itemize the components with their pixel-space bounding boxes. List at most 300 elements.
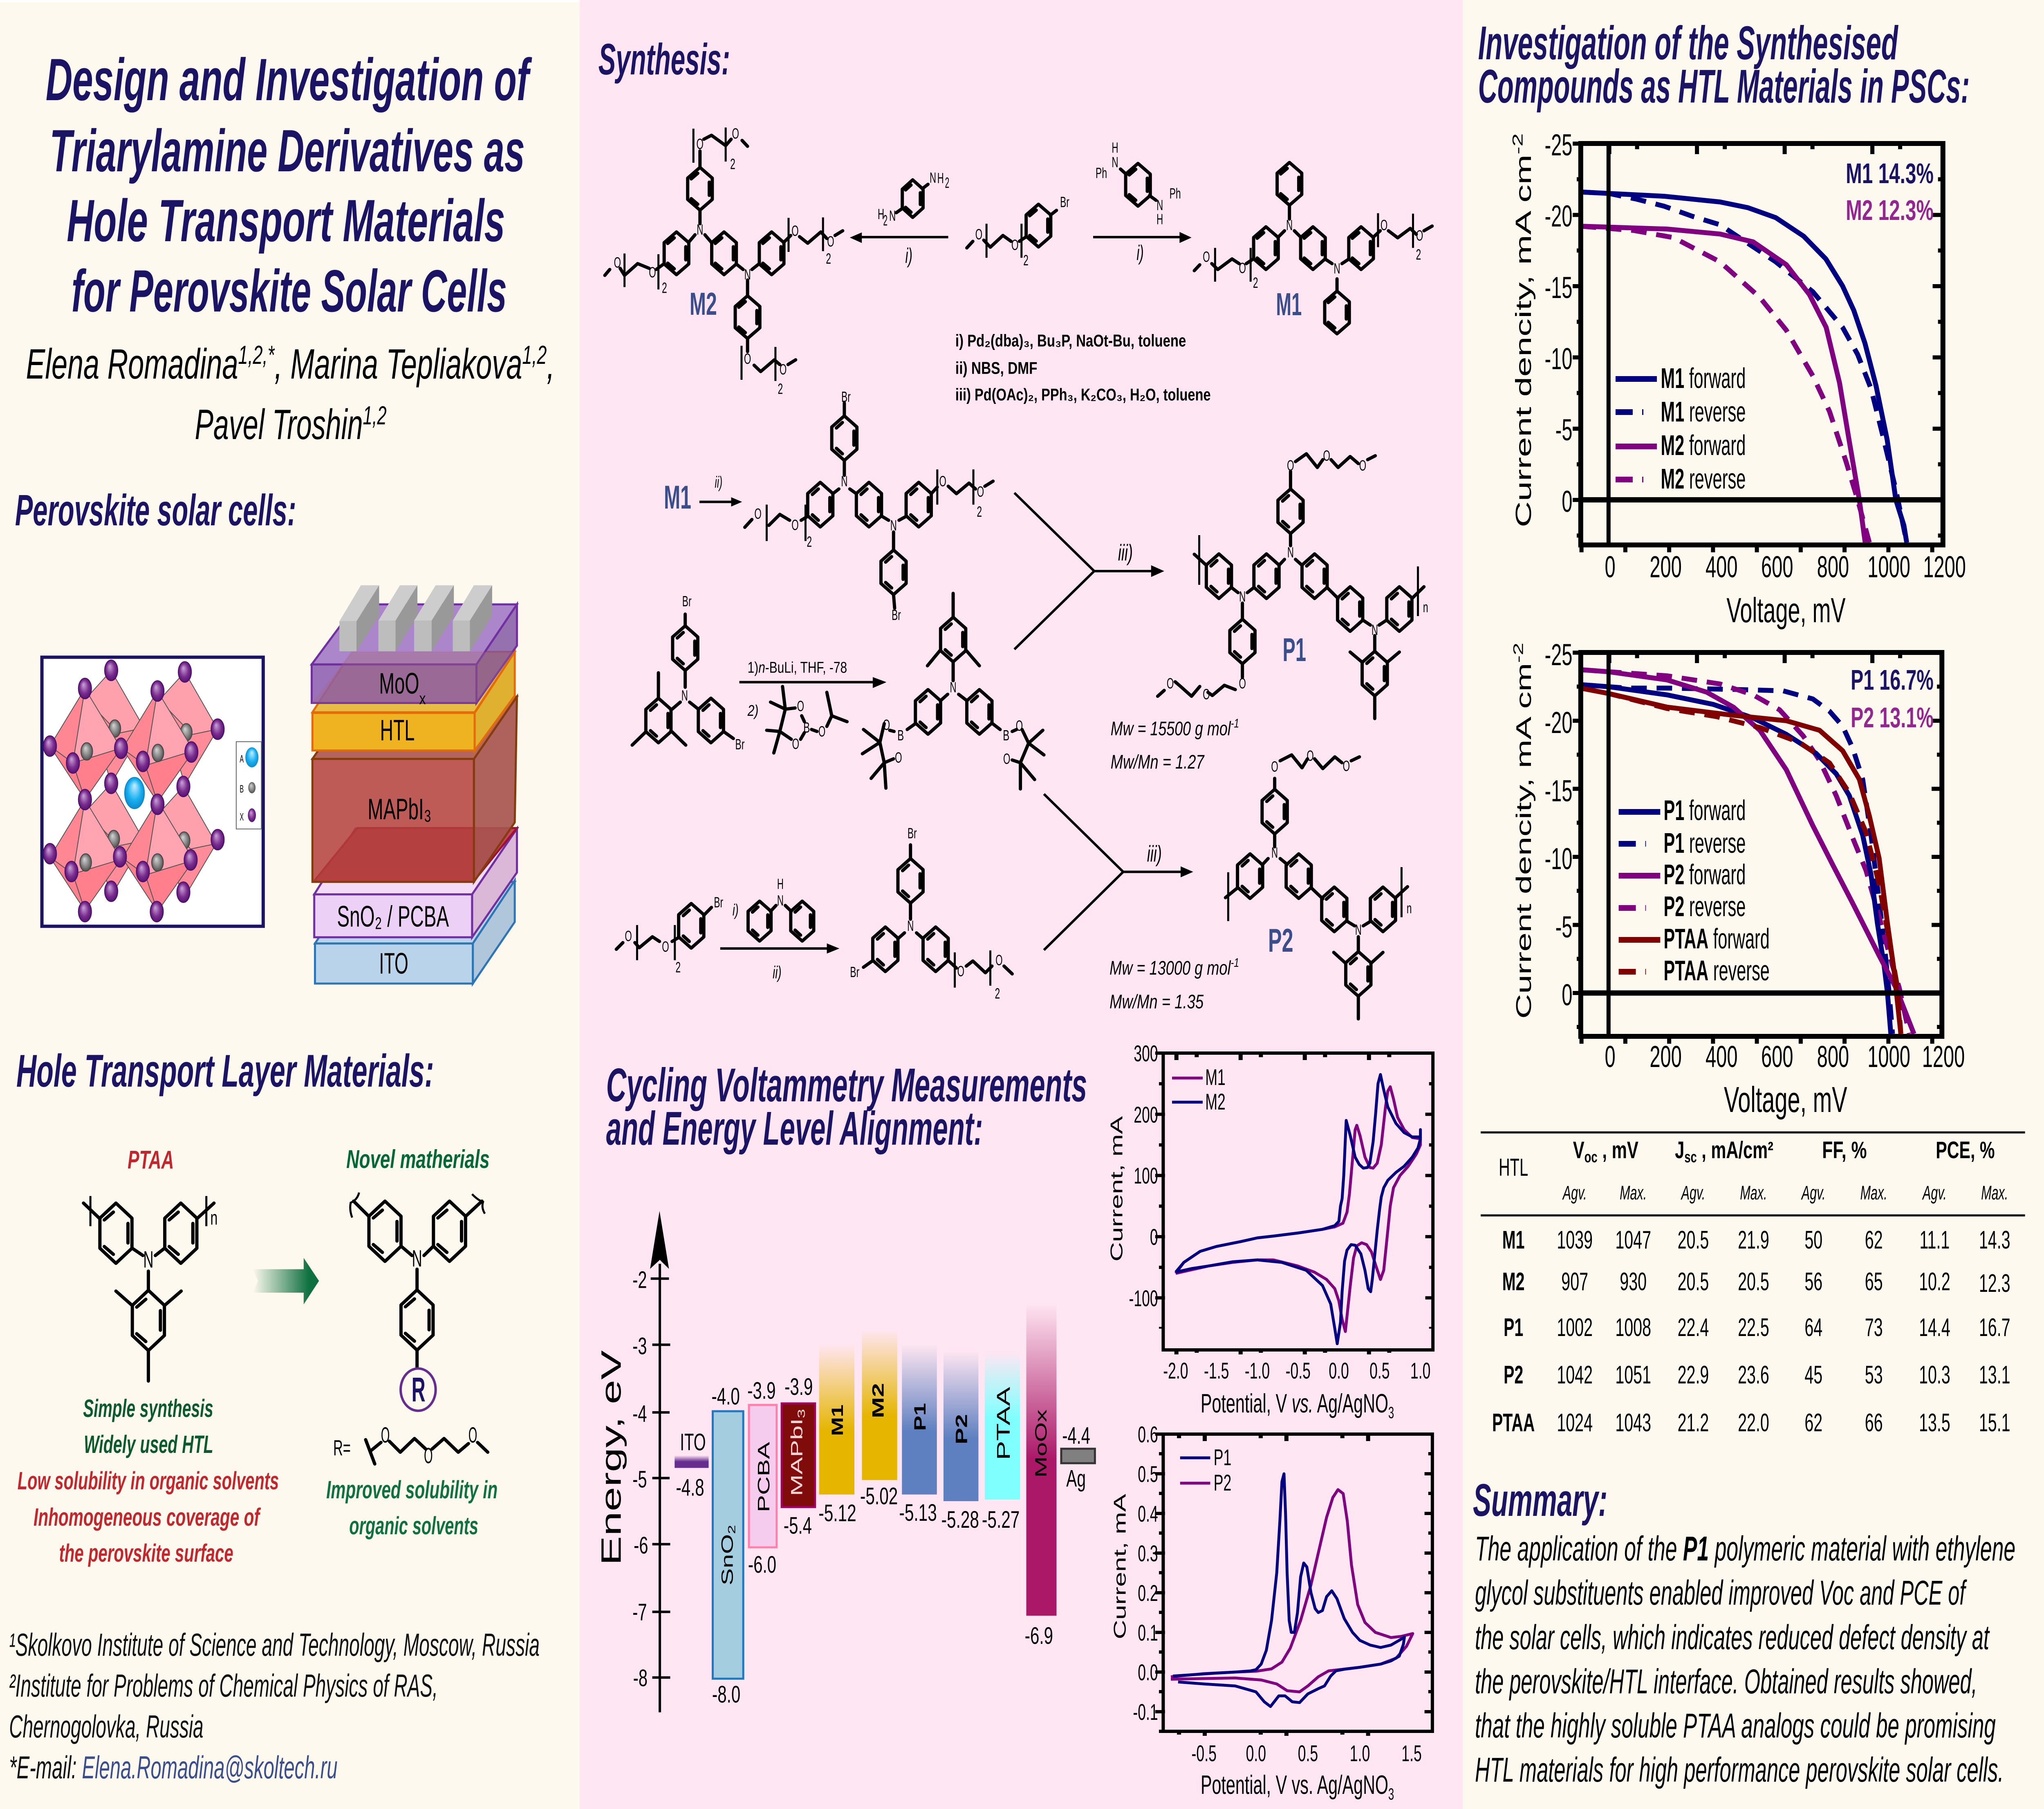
rotated bar labels: PCBA [754, 1442, 773, 1512]
novel material benefit [326, 1475, 498, 1540]
borylation arrow and conditions: 2) [747, 702, 758, 719]
p-phenylenediamine reagent: H [878, 206, 884, 222]
authors: 1,2 [522, 341, 547, 370]
isopropoxy boronate reagent: B [803, 720, 810, 736]
rotated bar labels [718, 1383, 1050, 1585]
dibromo mesitylamine: Br [682, 593, 692, 610]
heading: perovskite solar cells: Perovskite solar cells: [15, 486, 296, 535]
title: for Perovskite Solar Cells [72, 258, 507, 324]
CV2 frame and ticks [1160, 1432, 1432, 1734]
P1 molecular weight: Mw/Mn = 1.27 [1111, 751, 1205, 773]
synthesis scheme lower: polymers P1 and P2: Br [735, 736, 744, 753]
novel material structure: N [412, 1245, 422, 1271]
novel material structure: R= [333, 1435, 351, 1460]
table header: , mV [1598, 1137, 1638, 1163]
summary text: that the highly soluble PTAA analogs could be promising [1475, 1706, 1996, 1745]
N,N'-diphenyl-p-phenylenediamine reagent: Ph [1096, 164, 1107, 181]
diphenylamine reagent and arrow [720, 876, 839, 982]
novel material structure: O [424, 1443, 433, 1468]
table header: sc [1684, 1148, 1697, 1166]
row P1: 73 [1865, 1314, 1883, 1342]
JV2 efficiency labels: P1 16.7% [1851, 664, 1934, 696]
energy bars: -4 [632, 1401, 647, 1427]
affiliations: *E-mail: Elena.Romadina@skoltech.ru [9, 1750, 338, 1785]
legend: A B X ions: A [240, 753, 244, 764]
synthesis scheme upper: M1 and M2: 2 [945, 175, 949, 191]
CV1 tick labels: 200 [1134, 1102, 1158, 1128]
energy level diagram [596, 1211, 1095, 1713]
table header: HTL [1499, 1153, 1528, 1181]
JV1 tick labels: 200 [1650, 550, 1682, 584]
brominated M1: Br [841, 389, 851, 405]
synthesis scheme lower: polymers P1 and P2: Br [714, 894, 723, 911]
JV2 frame and axes [1578, 651, 1946, 1040]
bis-boronate monomer: O [883, 717, 890, 733]
CV1 frame and ticks [1160, 1051, 1433, 1352]
row M2: 907 [1561, 1268, 1588, 1296]
JV1 legend: M2 reverse [1661, 463, 1746, 495]
polymer P1: N [1372, 622, 1378, 638]
JV2 tick labels: -5 [1555, 910, 1572, 944]
synthesis scheme upper: M1 and M2: i) Pd₂(dba)₃, Bu₃P, NaOt-Bu, toluene [955, 331, 1186, 350]
PTAA pros and cons: the perovskite surface [59, 1539, 233, 1567]
brominated M1: O [939, 473, 946, 490]
bis-boronate monomer: N [950, 679, 957, 696]
JV1 axis titles: Voltage, mV [1726, 592, 1846, 630]
converging arrow to P2 [1044, 794, 1193, 950]
rotated bar labels: M2 [870, 1383, 888, 1418]
authors: 1,2,* [238, 341, 275, 370]
authors: Elena Romadina [26, 341, 226, 388]
CV1 legend: M2 [1205, 1089, 1226, 1114]
row PTAA: 21.2 [1678, 1409, 1709, 1437]
CV2 tick labels: -0.1 [1133, 1699, 1158, 1725]
panel: left background [0, 2, 580, 1809]
authors [26, 341, 555, 448]
layer: MoOx: MoO [379, 667, 419, 700]
PTAA structure [83, 1196, 217, 1381]
P2 molecular weight: -1 [1231, 955, 1239, 970]
legend: A B X ions: X [240, 811, 244, 823]
chart: CV of M1 and M2 [1107, 1041, 1433, 1422]
starting bromide: O [1011, 237, 1018, 253]
panel: middle background [580, 0, 1463, 1809]
summary text [1475, 1529, 2015, 1789]
CV1 curves [1176, 1074, 1421, 1344]
JV1 tick labels: 1200 [1923, 550, 1966, 584]
row PTAA [1492, 1409, 2010, 1437]
row M2: 56 [1804, 1268, 1822, 1296]
layer: HTL [312, 652, 515, 751]
polymer P2: N [1355, 922, 1362, 938]
bis-boronate monomer: B [897, 727, 904, 744]
compound M2: 2 [826, 250, 831, 267]
JV1 tick labels: -5 [1555, 413, 1572, 447]
JV2 legend: P1 forward [1664, 795, 1746, 827]
heading: cycling voltammetry: and Energy Level Alignment: [606, 1102, 983, 1155]
row PTAA: 13.5 [1919, 1409, 1950, 1437]
bis-boronate monomer: B [1003, 727, 1009, 744]
polymer P2 [1226, 748, 1412, 1019]
gradient arrow [253, 1258, 319, 1305]
CV1 legend [1172, 1065, 1226, 1114]
JV1 tick labels: 0 [1562, 485, 1572, 519]
CV2 tick labels: 0.1 [1138, 1620, 1158, 1645]
energy bars: -6 [634, 1532, 648, 1559]
arrow to M1: i) [1136, 241, 1144, 265]
brominated M1 [745, 389, 993, 623]
layer: MAPbI3: MAPbI₃ [368, 793, 431, 826]
energy bars: -8.0 [712, 1681, 740, 1708]
row M1: 14.3 [1979, 1226, 2010, 1254]
heading: synthesis: Synthesis: [598, 35, 730, 84]
energy bars: -5.12 [818, 1500, 856, 1527]
chart: J-V curves P1, P2 and PTAA [1511, 638, 1965, 1120]
CV2 axis titles: 3 [1388, 1785, 1394, 1804]
synthesis scheme upper: M1 and M2: Ph [1170, 185, 1181, 202]
rotated bar labels: SnO [718, 1535, 736, 1585]
Novel materials label: Novel matherials [346, 1145, 490, 1173]
brominated M1: N [841, 473, 847, 490]
compound M2: O [614, 254, 621, 271]
synthesis scheme upper: M1 and M2: iii) Pd(OAc)₂, PPh₃, K₂CO₃, H₂O, toluene [955, 385, 1211, 404]
JV1 tick labels: -10 [1544, 342, 1572, 376]
legend: A B X ions: B [240, 782, 244, 795]
JV1 legend: M2 forward [1661, 430, 1746, 462]
row P1: 14.4 [1919, 1314, 1950, 1342]
M1 to brominated M1 step: M1 [664, 479, 691, 516]
CV1 tick labels: -0.5 [1286, 1358, 1311, 1383]
P1 molecular weight [1111, 716, 1239, 773]
chart: J-V curves M1 and M2 [1510, 128, 1966, 630]
row P1: 22.4 [1678, 1314, 1709, 1342]
P2 molecular weight: Mw/Mn = 1.35 [1109, 991, 1204, 1013]
polymer P1: O [1239, 675, 1246, 692]
CV2 axis titles: Potential, V vs. Ag/AgNO [1201, 1770, 1388, 1800]
borylation arrow and conditions [740, 659, 886, 719]
row M1 [1502, 1226, 2010, 1254]
JV1 efficiency labels: M1 14.3% [1846, 158, 1934, 190]
converging arrow to P1: iii) [1118, 540, 1133, 566]
JV1 legend: M1 forward [1661, 363, 1746, 395]
HTL materials comparison [18, 1145, 498, 1567]
CV2 legend [1180, 1445, 1231, 1495]
CV1 axis titles: Potential, V vs. Ag/AgNO [1201, 1389, 1388, 1418]
layer: ITO [315, 880, 515, 984]
summary text: HTL materials for high performance perovskite solar cells. [1475, 1751, 2004, 1789]
dibromo glycol monomer: Br [908, 825, 917, 842]
energy bars: Ag [1066, 1466, 1086, 1492]
polymer P2: N [1271, 845, 1278, 861]
polymer P2: O [1271, 759, 1278, 775]
table header [1499, 1137, 2008, 1204]
JV2 tick labels: -15 [1544, 774, 1572, 808]
P1 molecular weight: Mw = 15500 g mol [1111, 718, 1335, 740]
table header: Agv. [1801, 1182, 1826, 1204]
JV2 legend: P1 reverse [1664, 827, 1746, 859]
authors: , Marina Tepliakova [274, 341, 522, 388]
CV1 tick labels: 0 [1150, 1224, 1158, 1250]
isopropoxy boronate reagent [766, 686, 847, 753]
row M2: 10.2 [1919, 1268, 1950, 1296]
title: Hole Transport Materials [67, 187, 505, 254]
energy bars: -5.13 [899, 1500, 937, 1526]
brominated M1: O [791, 517, 799, 534]
energy bars: -5.27 [982, 1506, 1020, 1533]
diphenylamine reagent and arrow: ii) [773, 963, 782, 982]
JV2 tick labels: -20 [1544, 706, 1572, 740]
CV1 tick labels: 300 [1134, 1041, 1158, 1066]
table: device parameters [1481, 1132, 2025, 1437]
CV2 legend: P2 [1214, 1470, 1231, 1495]
layer: MoOx [312, 604, 517, 708]
row P1: 16.7 [1979, 1314, 2010, 1342]
device stack diagram [312, 585, 517, 984]
layer: ITO: ITO [379, 947, 408, 980]
text: n [1423, 599, 1428, 616]
brominated M1: 2 [977, 504, 982, 520]
CV2 tick labels: 0.5 [1138, 1462, 1158, 1487]
heading: cycling voltammetry [606, 1058, 1087, 1155]
energy bars: -5.02 [860, 1483, 898, 1510]
energy bars: -4.0 [711, 1383, 740, 1410]
brominated M1: N [890, 517, 897, 534]
affiliations: Chernogolovka, Russia [9, 1709, 204, 1744]
polymer P1 [1158, 448, 1428, 719]
layer: SnO2 / PCBA: SnO₂ / PCBA [337, 900, 449, 933]
row P2: 23.6 [1738, 1361, 1769, 1389]
row P2: 1042 [1557, 1361, 1593, 1389]
compound M2: M2 [690, 286, 717, 322]
JV2 curves [1581, 670, 1914, 1034]
compound M2 [605, 125, 843, 397]
chart: J-V curves M1 and M2: -2 [1510, 133, 1526, 155]
affiliations: ¹Skolkovo Institute of Science and Technology, Moscow, Russia [9, 1627, 540, 1663]
compound M1 [1194, 162, 1432, 334]
JV1 curves [1581, 192, 1907, 542]
row P2 [1504, 1361, 2010, 1389]
JV2 axis titles: Voltage, mV [1724, 1079, 1847, 1120]
compound M2: 2 [730, 156, 735, 172]
compound M2: N [744, 266, 751, 282]
layer: HTL: HTL [380, 714, 415, 747]
chart: J-V curves M1 and M2: Current dencity, mA cm [1511, 169, 1536, 527]
starting bromide: 2 [1023, 252, 1029, 269]
row M1: 1039 [1557, 1226, 1593, 1254]
dibromo glycol monomer: O [995, 952, 1003, 968]
P2 molecular weight [1109, 955, 1239, 1013]
chart: CV of P1 and P2: Current, mA [1110, 1494, 1129, 1639]
PTAA pros and cons: Simple synthesis [83, 1394, 213, 1423]
starting bromide [967, 194, 1069, 269]
CV2 curves [1171, 1474, 1413, 1706]
compound M1: 2 [1416, 246, 1421, 263]
title: Triarylamine Derivatives as [49, 117, 525, 184]
CV2 tick labels: 0.2 [1138, 1580, 1158, 1606]
row PTAA: 1043 [1615, 1409, 1651, 1437]
CV1 tick labels: -1.5 [1204, 1358, 1229, 1383]
p-phenylenediamine reagent: 2 [883, 212, 888, 229]
title: Design and Investigation of [46, 46, 532, 113]
novel material benefit: Improved solubility in [326, 1475, 498, 1504]
CV2 tick labels: 1.5 [1401, 1741, 1422, 1766]
reaction conditions [955, 331, 1211, 404]
compound M1: M1 [1276, 286, 1302, 322]
CV1 tick labels: 100 [1134, 1163, 1158, 1188]
arrow to M2: i) [905, 244, 912, 267]
JV1 tick labels: -15 [1544, 271, 1572, 305]
energy bars [632, 1211, 1095, 1713]
heading: cycling voltammetry: Cycling Voltammetry Measurements [606, 1058, 1087, 1112]
brominated M1: 2 [807, 534, 812, 550]
CV1 axis titles: 3 [1388, 1404, 1394, 1422]
novel material structure: R [412, 1370, 426, 1409]
row M1: 20.5 [1678, 1226, 1709, 1254]
table header: V [1573, 1137, 1583, 1163]
compound M1: N [1334, 260, 1340, 277]
P2 molecular weight: Mw = 13000 g mol [1109, 957, 1334, 979]
JV2 tick labels: 0 [1605, 1040, 1616, 1074]
row M1: 50 [1804, 1226, 1822, 1254]
JV2 legend: PTAA forward [1664, 923, 1770, 955]
polymer P2: O [1307, 748, 1314, 764]
silver electrodes [339, 585, 492, 651]
chart: CV of M1 and M2: Current, mA [1107, 1116, 1126, 1262]
rotated bar labels: 3 [796, 1409, 807, 1418]
p-phenylenediamine reagent: N [889, 207, 896, 224]
polymer P1: O [1167, 675, 1174, 692]
energy bars: -3 [632, 1333, 647, 1360]
CV2 tick labels: 0.4 [1138, 1501, 1158, 1527]
table header: Max. [1620, 1182, 1647, 1204]
compound M2: O [649, 264, 656, 281]
energy bars: -8 [633, 1665, 648, 1692]
heading: summary: Summary: [1473, 1475, 1607, 1526]
brominated M1: Br [892, 607, 901, 623]
synthesis scheme upper: M1 and M2 [605, 125, 1432, 404]
JV2 tick labels: 1000 [1867, 1040, 1910, 1074]
converging arrow to P2: iii) [1147, 841, 1162, 867]
row P1 [1504, 1314, 2010, 1342]
polymer P1: O [1359, 457, 1366, 474]
bis-boronate monomer [863, 594, 1044, 789]
row P2: P2 [1504, 1361, 1523, 1389]
compound M1: O [1416, 227, 1423, 244]
starting bromide: O [975, 226, 982, 243]
PTAA pros and cons: Inhomogeneous coverage of [34, 1503, 261, 1531]
row P2: 10.3 [1919, 1361, 1950, 1389]
polymer P1: O [1287, 457, 1294, 474]
polymer P1: O [1203, 686, 1210, 703]
compound M1: O [1203, 248, 1210, 265]
JV1 tick labels: 1000 [1867, 550, 1910, 584]
chart: J-V curves P1, P2 and PTAA: Current dencity, mA cm [1512, 673, 1535, 1019]
converging arrow to P1 [1014, 493, 1164, 649]
row M1: 1047 [1615, 1226, 1651, 1254]
table header: oc [1585, 1148, 1598, 1166]
dibromo glycol monomer [850, 825, 1012, 1002]
JV2 tick labels: 800 [1817, 1040, 1849, 1074]
p-phenylenediamine reagent: N [930, 169, 936, 186]
table header: , mA/cm² [1697, 1137, 1773, 1163]
JV1 legend: M1 reverse [1661, 396, 1746, 428]
diphenylamine reagent and arrow: N [777, 892, 784, 909]
compound M1: O [1381, 217, 1387, 233]
JV2 tick labels: 200 [1650, 1040, 1682, 1074]
bis-boronate monomer: O [1003, 751, 1010, 767]
JV2 legend: PTAA reverse [1664, 955, 1770, 987]
compound M2: O [780, 361, 787, 378]
CV2 tick labels: 0.0 [1138, 1660, 1158, 1685]
row P1: 64 [1804, 1314, 1822, 1342]
PTAA structure: n [211, 1207, 217, 1229]
polymer P2: O [1343, 758, 1350, 774]
compound M2: O [744, 350, 751, 367]
rotated bar labels: PTAA [993, 1387, 1014, 1460]
p-phenylenediamine reagent [878, 169, 949, 229]
CV1 tick labels: -2.0 [1163, 1358, 1188, 1383]
energy bars: -3.9 [784, 1374, 813, 1400]
PTAA pros and cons: Low solubility in organic solvents [18, 1466, 279, 1495]
JV1 tick labels: -20 [1544, 200, 1572, 233]
authors: Pavel Troshin [195, 401, 358, 448]
heading: hole transport layer materials: Hole Transport Layer Materials: [16, 1045, 434, 1096]
table header: Agv. [1681, 1182, 1705, 1204]
energy bars: -4.4 [1062, 1423, 1090, 1449]
JV2 legend [1619, 795, 1770, 987]
JV2 tick labels: 1200 [1922, 1040, 1965, 1074]
energy bars: -5.4 [784, 1513, 812, 1539]
CV2 tick labels: 0.5 [1298, 1741, 1318, 1766]
synthesis scheme upper: M1 and M2: Br [1060, 194, 1069, 210]
CV1 tick labels: -100 [1129, 1286, 1158, 1311]
JV1 tick labels: 800 [1817, 550, 1849, 584]
row M2: 20.5 [1738, 1268, 1769, 1296]
layer: SnO2 / PCBA [314, 829, 517, 937]
compound M2: N [697, 221, 703, 238]
table header: Max. [1740, 1182, 1767, 1204]
row PTAA: 62 [1804, 1409, 1822, 1437]
JV1 tick labels [1544, 128, 1966, 584]
dibromo mesitylamine [632, 593, 744, 753]
panel: right background [1463, 0, 2044, 1809]
perovskite crystal structure [42, 657, 263, 926]
legend: A B X ions [236, 742, 261, 829]
JV2 legend: P2 reverse [1664, 891, 1746, 923]
arrow to M2 [850, 233, 948, 267]
bis-boronate monomer: O [895, 750, 902, 766]
rotated bar labels: MoOx [1032, 1409, 1050, 1478]
CV1 legend: M1 [1205, 1065, 1226, 1090]
JV1 tick labels: 400 [1706, 550, 1738, 584]
chart: CV of P1 and P2 [1110, 1422, 1432, 1804]
JV2 tick labels: 600 [1761, 1040, 1793, 1074]
energy bars: -6.0 [748, 1551, 776, 1578]
table header: Max. [1860, 1182, 1887, 1204]
N,N'-diphenyl-p-phenylenediamine reagent [1096, 139, 1181, 227]
JV1 tick labels: 600 [1761, 550, 1793, 584]
CV2 tick labels [1133, 1422, 1422, 1766]
row M1: 21.9 [1738, 1226, 1769, 1254]
compound M2: O [791, 222, 799, 239]
row M1: 62 [1865, 1226, 1883, 1254]
N,N'-diphenyl-p-phenylenediamine reagent: N [1112, 154, 1118, 170]
energy bars: -5.28 [941, 1506, 979, 1533]
row M1: 11.1 [1920, 1226, 1950, 1254]
bromo-glycol starting material: O [662, 939, 669, 955]
layer: MAPbI3 [312, 697, 517, 882]
rotated bar labels: 2 [726, 1525, 738, 1534]
